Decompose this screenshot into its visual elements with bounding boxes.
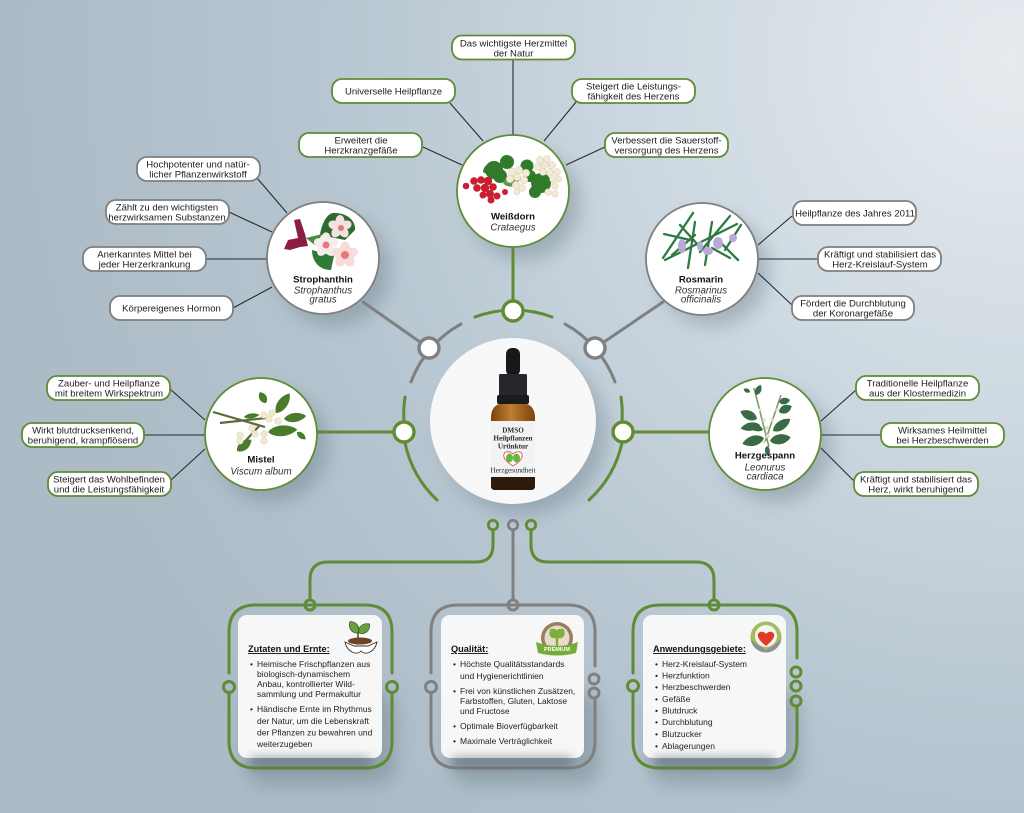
subtitle: Strophanthus gratus: gratus: [309, 294, 337, 306]
icon: premium badge: [536, 622, 578, 656]
pill: Wirksames Heilmittel: [881, 423, 1004, 447]
title: Herzgespann: Herzgespann: [735, 450, 795, 462]
pill: Steigert das Wohlbefinden: und die Leistungsfähigkeit: [54, 484, 165, 496]
pill: Das wichtigste Herzmittel: [452, 36, 575, 60]
list: Herzfunktion: [662, 670, 710, 680]
connector lines: Strophanthin facts: [206, 178, 287, 308]
list: •: [655, 717, 658, 727]
subtitle: Leonurus cardiaca: cardiaca: [746, 472, 784, 482]
pills: Mistel facts: [22, 376, 171, 496]
centre circle with bottle: [430, 338, 596, 504]
list: Anbau, kontrollierter Wild-: [257, 679, 355, 689]
title: Rosmarin: Rosmarin: [679, 274, 723, 286]
pill: Verbessert die Sauerstoffversorgung: [605, 133, 728, 157]
list: Optimale Bioverfügbarkeit: [460, 721, 558, 731]
list: Herzbeschwerden: [662, 682, 731, 692]
pill: Zauber- und Heilpflanze: [47, 376, 170, 400]
list: [453, 659, 575, 746]
panel: Rosmarin: [646, 203, 758, 315]
bottle label text: Urtinktur: [498, 442, 529, 450]
pills: Herzgespann facts: [854, 376, 1004, 496]
list: sammlung und Permakultur: [257, 689, 361, 699]
icon: heart with leaves: [504, 452, 522, 466]
subtitle: Viscum album: Viscum album: [230, 466, 292, 478]
list: •: [655, 670, 658, 680]
pill: Körpereigenes Hormon: [110, 296, 233, 320]
pill: Zählt zu den wichtigsten: Zählt zu den wichtigsten: [116, 202, 218, 214]
pill: Kräftigt und stabilisiert das Herz: [854, 472, 978, 496]
list: und Fructose: [460, 706, 510, 716]
list: •: [453, 736, 456, 746]
list: Blutdruck: [662, 706, 698, 716]
icon: rosemary sprig: [663, 213, 741, 268]
pill: Verbessert die Sauerstoffversorgung: Verbessert die Sauerstoff-: [611, 136, 722, 146]
list: [655, 659, 747, 751]
pill: Erweitert die Herzkranzgefäße: Herzkranzgefäße: [324, 146, 398, 156]
bottle label text: DMSO: [502, 426, 524, 434]
subtitle: Strophanthus gratus: [294, 286, 352, 306]
heading: Anwendungsgebiete:: [653, 644, 746, 654]
panel: Mistel: [205, 378, 317, 490]
pill: Das wichtigste Herzmittel: der Natur: [494, 48, 534, 60]
panel frame: [633, 605, 797, 768]
panel: Weißdorn: [457, 135, 569, 247]
panel: Anwendungsgebiete: [628, 600, 801, 768]
list: Gefäße: [662, 694, 691, 704]
icon: strophanthus flowers: [284, 213, 359, 270]
pill: Zählt zu den wichtigsten: [106, 200, 229, 224]
pill: Zauber- und Heilpflanze: mit breitem Wirkspektrum: [55, 388, 163, 400]
connector lines: Weißdorn facts: [423, 59, 605, 165]
pill: Kräftigt und stabilisiert: Herz-Kreislauf-System: [832, 260, 928, 270]
list: •: [453, 659, 456, 669]
panel: Strophanthin: [267, 202, 379, 314]
list: Farbstoffen, Gluten, Laktose: [460, 696, 567, 706]
icon: rosemary blossoms: [678, 234, 737, 255]
list: •: [453, 686, 456, 696]
pill: Hochpotenter Pflanzenwirkstoff: Hochpotenter und natür-: [146, 160, 250, 170]
list: Frei von künstlichen Zusätzen,: [460, 686, 575, 696]
connector lines: Herzgespann facts: [821, 390, 881, 482]
list: biologisch-dynamischem: [257, 669, 350, 679]
pills: Weißdorn facts: [299, 36, 728, 157]
heading: Qualität:: [451, 644, 488, 654]
pill: Körpereigenes Hormon: Körpereigenes Hormon: [122, 304, 221, 314]
pill: Das wichtigste Herzmittel: Das wichtigste Herzmittel: [460, 38, 567, 50]
list: Blutzucker: [662, 729, 702, 739]
subtitle: Leonurus cardiaca: Leonurus: [745, 462, 786, 474]
subtitle: Rosmarinus officinalis: Rosmarinus: [675, 286, 727, 296]
bottle label text: Herzgesundheit: [490, 466, 536, 474]
pill: Wirksames Heilmittel: bei Herzbeschwerden: [896, 436, 989, 446]
list: der Natur, um die Lebenskraft: [257, 716, 370, 726]
pill: Universelle Heilpflanze: [332, 79, 455, 103]
list: Ablagerungen: [662, 741, 715, 751]
connectors from centre to info cards: [310, 520, 714, 600]
pill: Fördert die Durchblutung: der Koronargefäße: [813, 308, 893, 320]
list: •: [250, 659, 253, 669]
bottle label text: [490, 426, 536, 474]
panel frame: [431, 605, 595, 768]
pill: Anerkanntes Mittel: [83, 247, 206, 271]
pill: Traditionelle Heilpflanze: [856, 376, 979, 400]
pill: Heilpflanze des Jahres 2011: [793, 201, 916, 225]
icon: hawthorn branch: [463, 155, 562, 204]
icon: mistletoe sprig: [213, 390, 307, 455]
panel: Zutaten und Ernte: [224, 600, 398, 768]
list: •: [655, 706, 658, 716]
list: •: [655, 741, 658, 751]
icon: motherwort plant: [739, 384, 793, 456]
heading: Zutaten und Ernte:: [248, 644, 330, 654]
list: •: [655, 729, 658, 739]
pill: Zählt zu den wichtigsten: herzwirksamen Substanzen: [108, 212, 226, 224]
list: [250, 659, 373, 749]
title: Weißdorn: Weißdorn: [491, 212, 535, 222]
title: Mistel: Mistel: [247, 454, 275, 466]
list: •: [655, 659, 658, 669]
title: Strophanthin: Strophanthin: [293, 274, 353, 286]
pill: Kräftigt und stabilisiert das Herz: Kräftigt und stabilisiert das: [860, 474, 972, 486]
bottle label text: Heilpflanzen: [493, 434, 533, 442]
pill: Anerkanntes Mittel: jeder Herzerkrankung: [98, 260, 190, 270]
pill: Fördert die Durchblutung: [792, 296, 914, 320]
panel frame: [229, 605, 392, 768]
icon: heart in tree and hands: [750, 622, 782, 652]
list: weiterzugeben: [256, 739, 313, 749]
soft drop shadows: [216, 148, 832, 785]
list: Händische Ernte im Rhythmus: [257, 704, 372, 714]
subtitle: Strophanthus gratus: Strophanthus: [294, 286, 352, 296]
pill: Steigert die Leistungsfähigkeit: fähigkeit des Herzens: [588, 92, 680, 102]
ring nodes: [394, 301, 633, 442]
list: Durchblutung: [662, 717, 713, 727]
pill: Traditionelle Heilpflanze: aus der Klostermedizin: [869, 388, 966, 400]
pill: Kräftigt und stabilisiert: [818, 247, 941, 271]
list: •: [453, 721, 456, 731]
pill: Steigert die Leistungsfähigkeit: [572, 79, 695, 103]
pill: Erweitert die Herzkranzgefäße: Erweitert die: [334, 136, 388, 146]
pill: Zauber- und Heilpflanze: Zauber- und Heilpflanze: [58, 378, 160, 390]
pills: Rosmarin facts: [792, 201, 941, 320]
pill: Steigert das Wohlbefinden: [48, 472, 171, 496]
icon: seedling in hands: [345, 619, 377, 653]
icon: premium badge: PREMIUM: [544, 647, 570, 653]
pill: Wirkt blutdrucksenkend: [22, 423, 144, 447]
panel: Herzgespann: [709, 378, 821, 490]
pill: Traditionelle Heilpflanze: Traditionelle Heilpflanze: [867, 378, 968, 390]
subtitle: Leonurus cardiaca: [745, 462, 786, 482]
ring arcs and spokes around the centre: [318, 247, 708, 500]
list: und Hygienerichtlinien: [460, 671, 544, 681]
connector lines: Rosmarin facts: [758, 216, 818, 305]
pills: Strophanthin facts: [83, 157, 260, 320]
subtitle: Rosmarinus officinalis: [675, 286, 727, 306]
pill: Steigert die Leistungsfähigkeit: Steigert die Leistungs-: [586, 82, 681, 92]
connector lines: Mistel facts: [144, 389, 205, 480]
pill: Erweitert die Herzkranzgefäße: [299, 133, 422, 157]
list: Höchste Qualitätsstandards: [460, 659, 564, 669]
pill: Fördert die Durchblutung: Fördert die Durchblutung: [800, 298, 906, 310]
panel: Qualität: [426, 600, 599, 768]
list: der Pflanzen zu bewahren und: [257, 728, 373, 738]
pill: Wirkt blutdrucksenkend: Wirkt blutdrucksenkend,: [32, 426, 134, 436]
pill: Anerkanntes Mittel: Anerkanntes Mittel bei: [97, 250, 192, 260]
list: •: [655, 694, 658, 704]
icon: dropper bottle: [490, 348, 536, 490]
pill: Hochpotenter Pflanzenwirkstoff: [137, 157, 260, 181]
pill: Hochpotenter Pflanzenwirkstoff: licher Pflanzenwirkstoff: [149, 170, 247, 180]
pill: Steigert das Wohlbefinden: Steigert das Wohlbefinden: [53, 474, 165, 486]
list: •: [250, 704, 253, 714]
subtitle: Rosmarinus officinalis: officinalis: [681, 294, 721, 306]
pill: Verbessert die Sauerstoffversorgung: versorgung des Herzens: [614, 146, 719, 156]
list: Herz-Kreislauf-System: [662, 659, 747, 669]
pill: Kräftigt und stabilisiert: Kräftigt und stabilisiert das: [824, 250, 936, 260]
list: Maximale Verträglichkeit: [460, 736, 553, 746]
list: Heimische Frischpflanzen aus: [257, 659, 370, 669]
pill: Wirksames Heilmittel: Wirksames Heilmittel: [898, 426, 987, 436]
pill: Wirkt blutdrucksenkend: beruhigend, krampflösend: [28, 436, 138, 446]
pill: Kräftigt und stabilisiert das Herz: Herz, wirkt beruhigend: [868, 484, 964, 496]
pill: Heilpflanze des Jahres 2011: Heilpflanze des Jahres 2011: [795, 208, 915, 220]
pill: Universelle Heilpflanze: Universelle Heilpflanze: [345, 86, 442, 98]
list: •: [655, 682, 658, 692]
subtitle: Crataegus: Crataegus: [490, 222, 536, 234]
